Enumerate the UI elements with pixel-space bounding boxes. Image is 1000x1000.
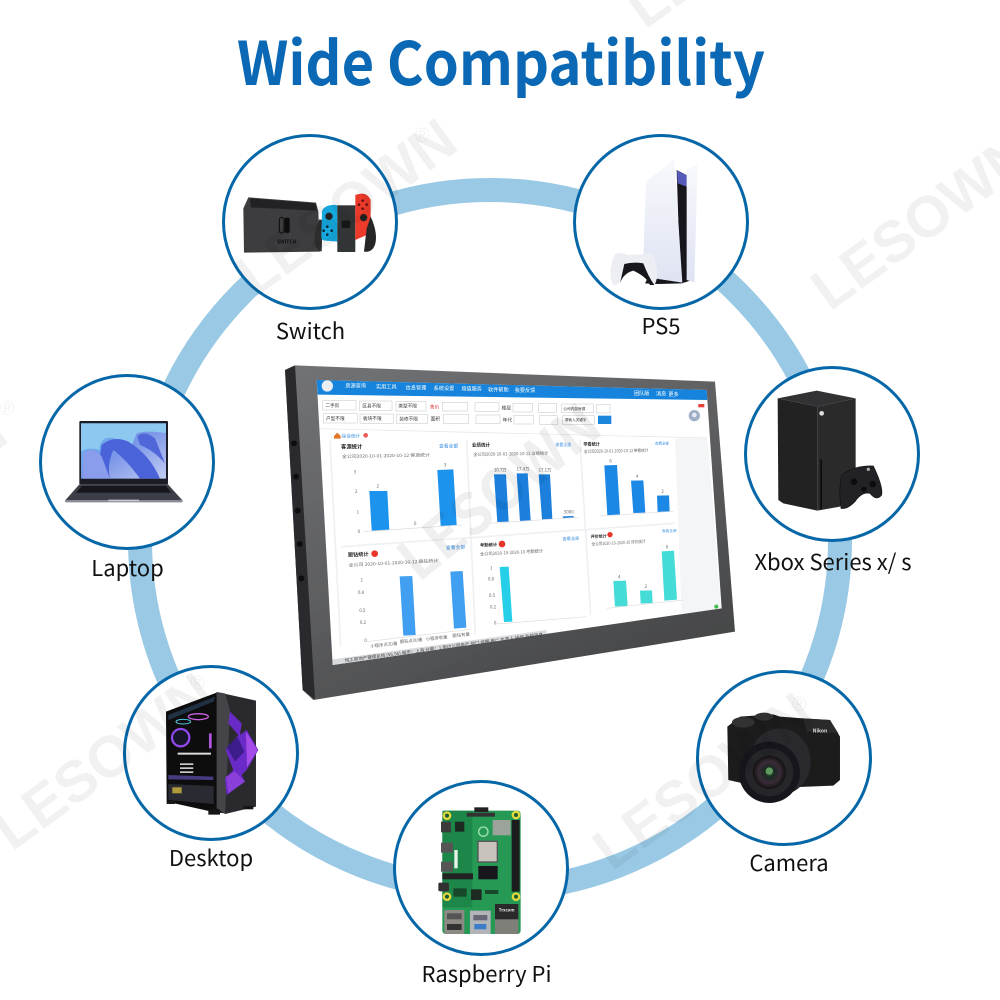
connecting ring (140, 190, 840, 890)
chart: top left: 0 (358, 529, 361, 535)
chart: top middle: 查看全部 (555, 441, 571, 448)
icon: Xbox console and controller (778, 391, 882, 511)
chart: bottom middle: 0.5 (489, 593, 496, 599)
chart: bottom right: 2 (645, 584, 648, 590)
chart: top middle: 业绩统计 (472, 442, 490, 449)
icon: Nintendo Switch console: SWITCH (277, 239, 297, 246)
chart: bottom left: 跟钻点3D量 (399, 636, 423, 645)
chart: bottom left: 全公司 2020-10-01-2020-10-12 跟钻统计 (348, 557, 439, 569)
watermarks: ® (0, 398, 15, 420)
chart: bottom middle: 1 (490, 565, 493, 571)
watermarks: ® (190, 673, 205, 695)
chart: top right: 2 (661, 489, 664, 495)
monitor screen: 请输入关键字 (565, 417, 587, 423)
chart: top left (341, 442, 462, 535)
top menu bar: 系统设置 (434, 384, 454, 392)
chart: top right: 带看统计 (583, 441, 600, 448)
monitor screen: 板块不限 (363, 415, 382, 422)
chart: bottom middle: 0.8 (488, 577, 495, 583)
chart: top middle: 10.7万 (494, 467, 507, 473)
chart: top left: 2 (355, 489, 358, 495)
chart: bottom left: 查看全部 (446, 544, 466, 551)
chart: top left: 2 (377, 484, 380, 490)
tab: summary statistics: 综合统计 (342, 433, 361, 440)
monitor screen: 区县不限 (362, 402, 381, 409)
chart: top left: 3 (354, 469, 357, 475)
panel: Xbox (746, 368, 918, 540)
panel: Raspberry Pi (394, 782, 568, 954)
panel: Laptop (40, 376, 214, 548)
chart: bottom left: 0.2 (360, 620, 367, 626)
chart: top left: 全公司2020-10-01-2020-10-12 客源统计 (342, 451, 431, 460)
chart: bottom right: 8 (666, 545, 669, 551)
monitor screen: 面积 (431, 416, 440, 423)
top menu bar: 信息管理 (406, 383, 426, 391)
chart: top right: 查看全部 (655, 441, 669, 447)
panel: Switch (224, 136, 396, 308)
chart: bottom middle: 全公司2020-10-2020-10 考勤统计 (480, 547, 544, 558)
chart: top right: 全公司2020-10-01-2020-10-12 带看统计 (584, 447, 649, 455)
chart: top middle: 17.4万 (517, 467, 530, 473)
monitor screen: 类型不限 (398, 403, 417, 410)
top menu bar: 房源查询 (345, 382, 366, 390)
monitor frame (285, 365, 735, 700)
chart: bottom middle: 0 (494, 621, 497, 627)
top menu bar: 更多 (668, 390, 679, 398)
label: Desktop: Desktop (169, 841, 253, 873)
chart: top left: 3 (444, 463, 447, 469)
tab: summary statistics (334, 433, 368, 440)
chart: bottom middle: 查看全部 (562, 535, 579, 542)
top menu bar: 软件帮助 (488, 385, 509, 393)
chart: bottom left: 0 (364, 638, 367, 644)
chart: bottom left: 跟钻有量 (452, 630, 471, 639)
monitor screen: 二手房 (325, 402, 340, 409)
top menu bar: 团队版 (634, 389, 649, 397)
top menu bar: 我要反馈 (515, 386, 535, 394)
watermark on screen: LESOWN (377, 381, 616, 597)
watermarks: ® (415, 125, 430, 147)
bottom status bar: 悦工房地产管理系统 (V6.56) 城市：上海 分期：1 周边公园房产 部门 商圈 推广 负责人 操作 系统消息 (344, 631, 544, 664)
panel: central monitor (285, 365, 735, 700)
chart: bottom right: 全公司2020-10-2020-10 评价统计 (591, 538, 646, 548)
chart: top right (583, 441, 673, 516)
chart: bottom middle: 0.2 (490, 604, 497, 610)
top menu bar: 实用工具 (376, 383, 397, 391)
chart: top middle: 5000 (564, 509, 574, 515)
chart: bottom right: 评价统计 (590, 532, 607, 540)
filter rows (323, 401, 610, 424)
top menu bar: 消息 (656, 390, 666, 398)
watermarks: LESOWN (224, 106, 469, 309)
chart: bottom left: 小程序有量 (425, 633, 448, 643)
chart: bottom right: 查看全部 (662, 528, 677, 534)
chart: top left: 0 (414, 521, 417, 527)
chart: top middle: 全公司2020-10-01-2020-10-12 业绩统计 (473, 450, 549, 458)
chart: bottom left: 1 (361, 578, 364, 584)
top menu bar (317, 380, 707, 400)
label: Switch: Switch (276, 314, 345, 346)
panel: PS5 (574, 136, 748, 308)
icon: Nikon camera: Nikon (813, 727, 827, 734)
chart: bottom middle: 考勤统计 (480, 541, 498, 549)
monitor screen: 楼层 (502, 404, 511, 411)
chart panel dividers (330, 440, 675, 647)
chart: bottom left (348, 544, 471, 650)
watermarks: LESOWN (581, 680, 826, 883)
chart: top left: 1 (357, 509, 360, 515)
monitor screen: 年代 (503, 416, 512, 423)
label: Laptop: Laptop (91, 551, 164, 583)
label: Xbox Series x/ s: Xbox Series x/ s (754, 545, 912, 577)
watermarks: ® (792, 694, 807, 716)
icon: Nintendo Switch console (243, 194, 376, 253)
chart: bottom left: 0.8 (358, 590, 365, 596)
chart: top left: 客源统计 (341, 442, 363, 450)
label: PS5: PS5 (641, 309, 681, 341)
label: Camera: Camera (749, 846, 829, 878)
panel: Desktop (124, 666, 298, 840)
icon: Raspberry Pi board (438, 807, 521, 934)
monitor screen: 售价 (430, 403, 440, 410)
chart: top right: 6 (609, 458, 612, 464)
chart: top middle: 17.1万 (539, 467, 552, 473)
icon: gaming desktop PC (166, 692, 258, 815)
monitor screen: 户型不限 (326, 415, 345, 422)
bottom status bar (333, 605, 718, 665)
icon: Nikon camera (727, 713, 840, 803)
chart: bottom right (590, 528, 683, 608)
top menu bar: 增值服务 (461, 385, 482, 393)
icon: PS5 console and controller (610, 159, 698, 285)
icon: laptop (65, 421, 183, 502)
chart: top right: 4 (636, 474, 639, 480)
label: Raspberry Pi: Raspberry Pi (421, 957, 552, 989)
chart: top left: 查看全部 (439, 443, 458, 450)
monitor screen: 装修不限 (399, 415, 418, 422)
chart: bottom middle (480, 535, 587, 627)
chart: bottom left: 小程序点3D量 (370, 640, 398, 650)
chart: bottom left: 跟钻统计 (348, 550, 369, 559)
chart: top middle (472, 441, 578, 523)
chart: bottom right: 4 (618, 574, 621, 580)
icon: Raspberry Pi board: Trxcom (499, 907, 515, 913)
monitor screen: 公司内部房源 (563, 406, 586, 412)
monitor screen (317, 380, 722, 665)
panel: Camera (698, 672, 870, 844)
title: Wide Compatibility (237, 16, 765, 103)
chart: bottom left: 0.5 (359, 608, 366, 614)
